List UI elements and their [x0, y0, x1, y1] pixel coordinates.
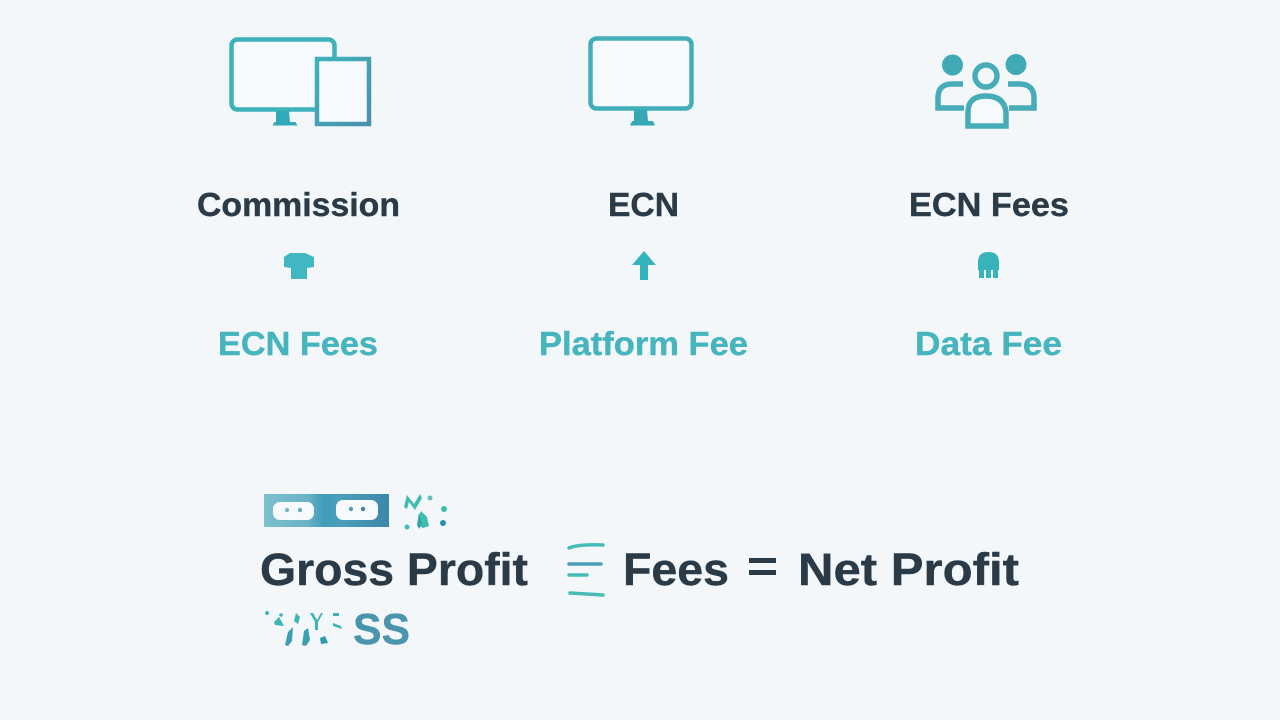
- text: Fees: Fees: [623, 544, 729, 595]
- label: ECN Fees: ECN Fees: [218, 325, 378, 362]
- text: Gross Profit: Gross Profit: [260, 544, 528, 595]
- heading: Commission: Commission: [197, 186, 400, 223]
- label: Platform Fee: Platform Fee: [539, 325, 748, 362]
- graphic: toggle bar: [264, 494, 389, 527]
- icon: small arrow cap: [284, 253, 314, 279]
- text: SS: SS: [353, 605, 410, 654]
- icon: desktop monitor and tablet: [232, 40, 369, 126]
- icon: jellyfish glyph: [978, 252, 999, 278]
- heading: ECN: ECN: [608, 186, 679, 223]
- graphic: garbled teal marks: [404, 494, 447, 530]
- icon: three users: [938, 54, 1034, 126]
- panel: ECN column: [539, 38, 748, 362]
- label: Data Fee: Data Fee: [915, 325, 1062, 362]
- text: Net Profit: Net Profit: [798, 544, 1019, 595]
- graphic: garbled teal marks lower: [265, 611, 342, 646]
- icon: garbled minus lines: [569, 545, 603, 595]
- icon: desktop monitor: [590, 38, 692, 126]
- panel: net profit formula: [260, 494, 1019, 654]
- heading: ECN Fees: ECN Fees: [909, 186, 1069, 223]
- text: equals sign: [749, 558, 776, 575]
- icon: up arrow: [632, 251, 656, 280]
- panel: commission column: [197, 40, 400, 362]
- panel: ECN Fees column: [909, 54, 1069, 362]
